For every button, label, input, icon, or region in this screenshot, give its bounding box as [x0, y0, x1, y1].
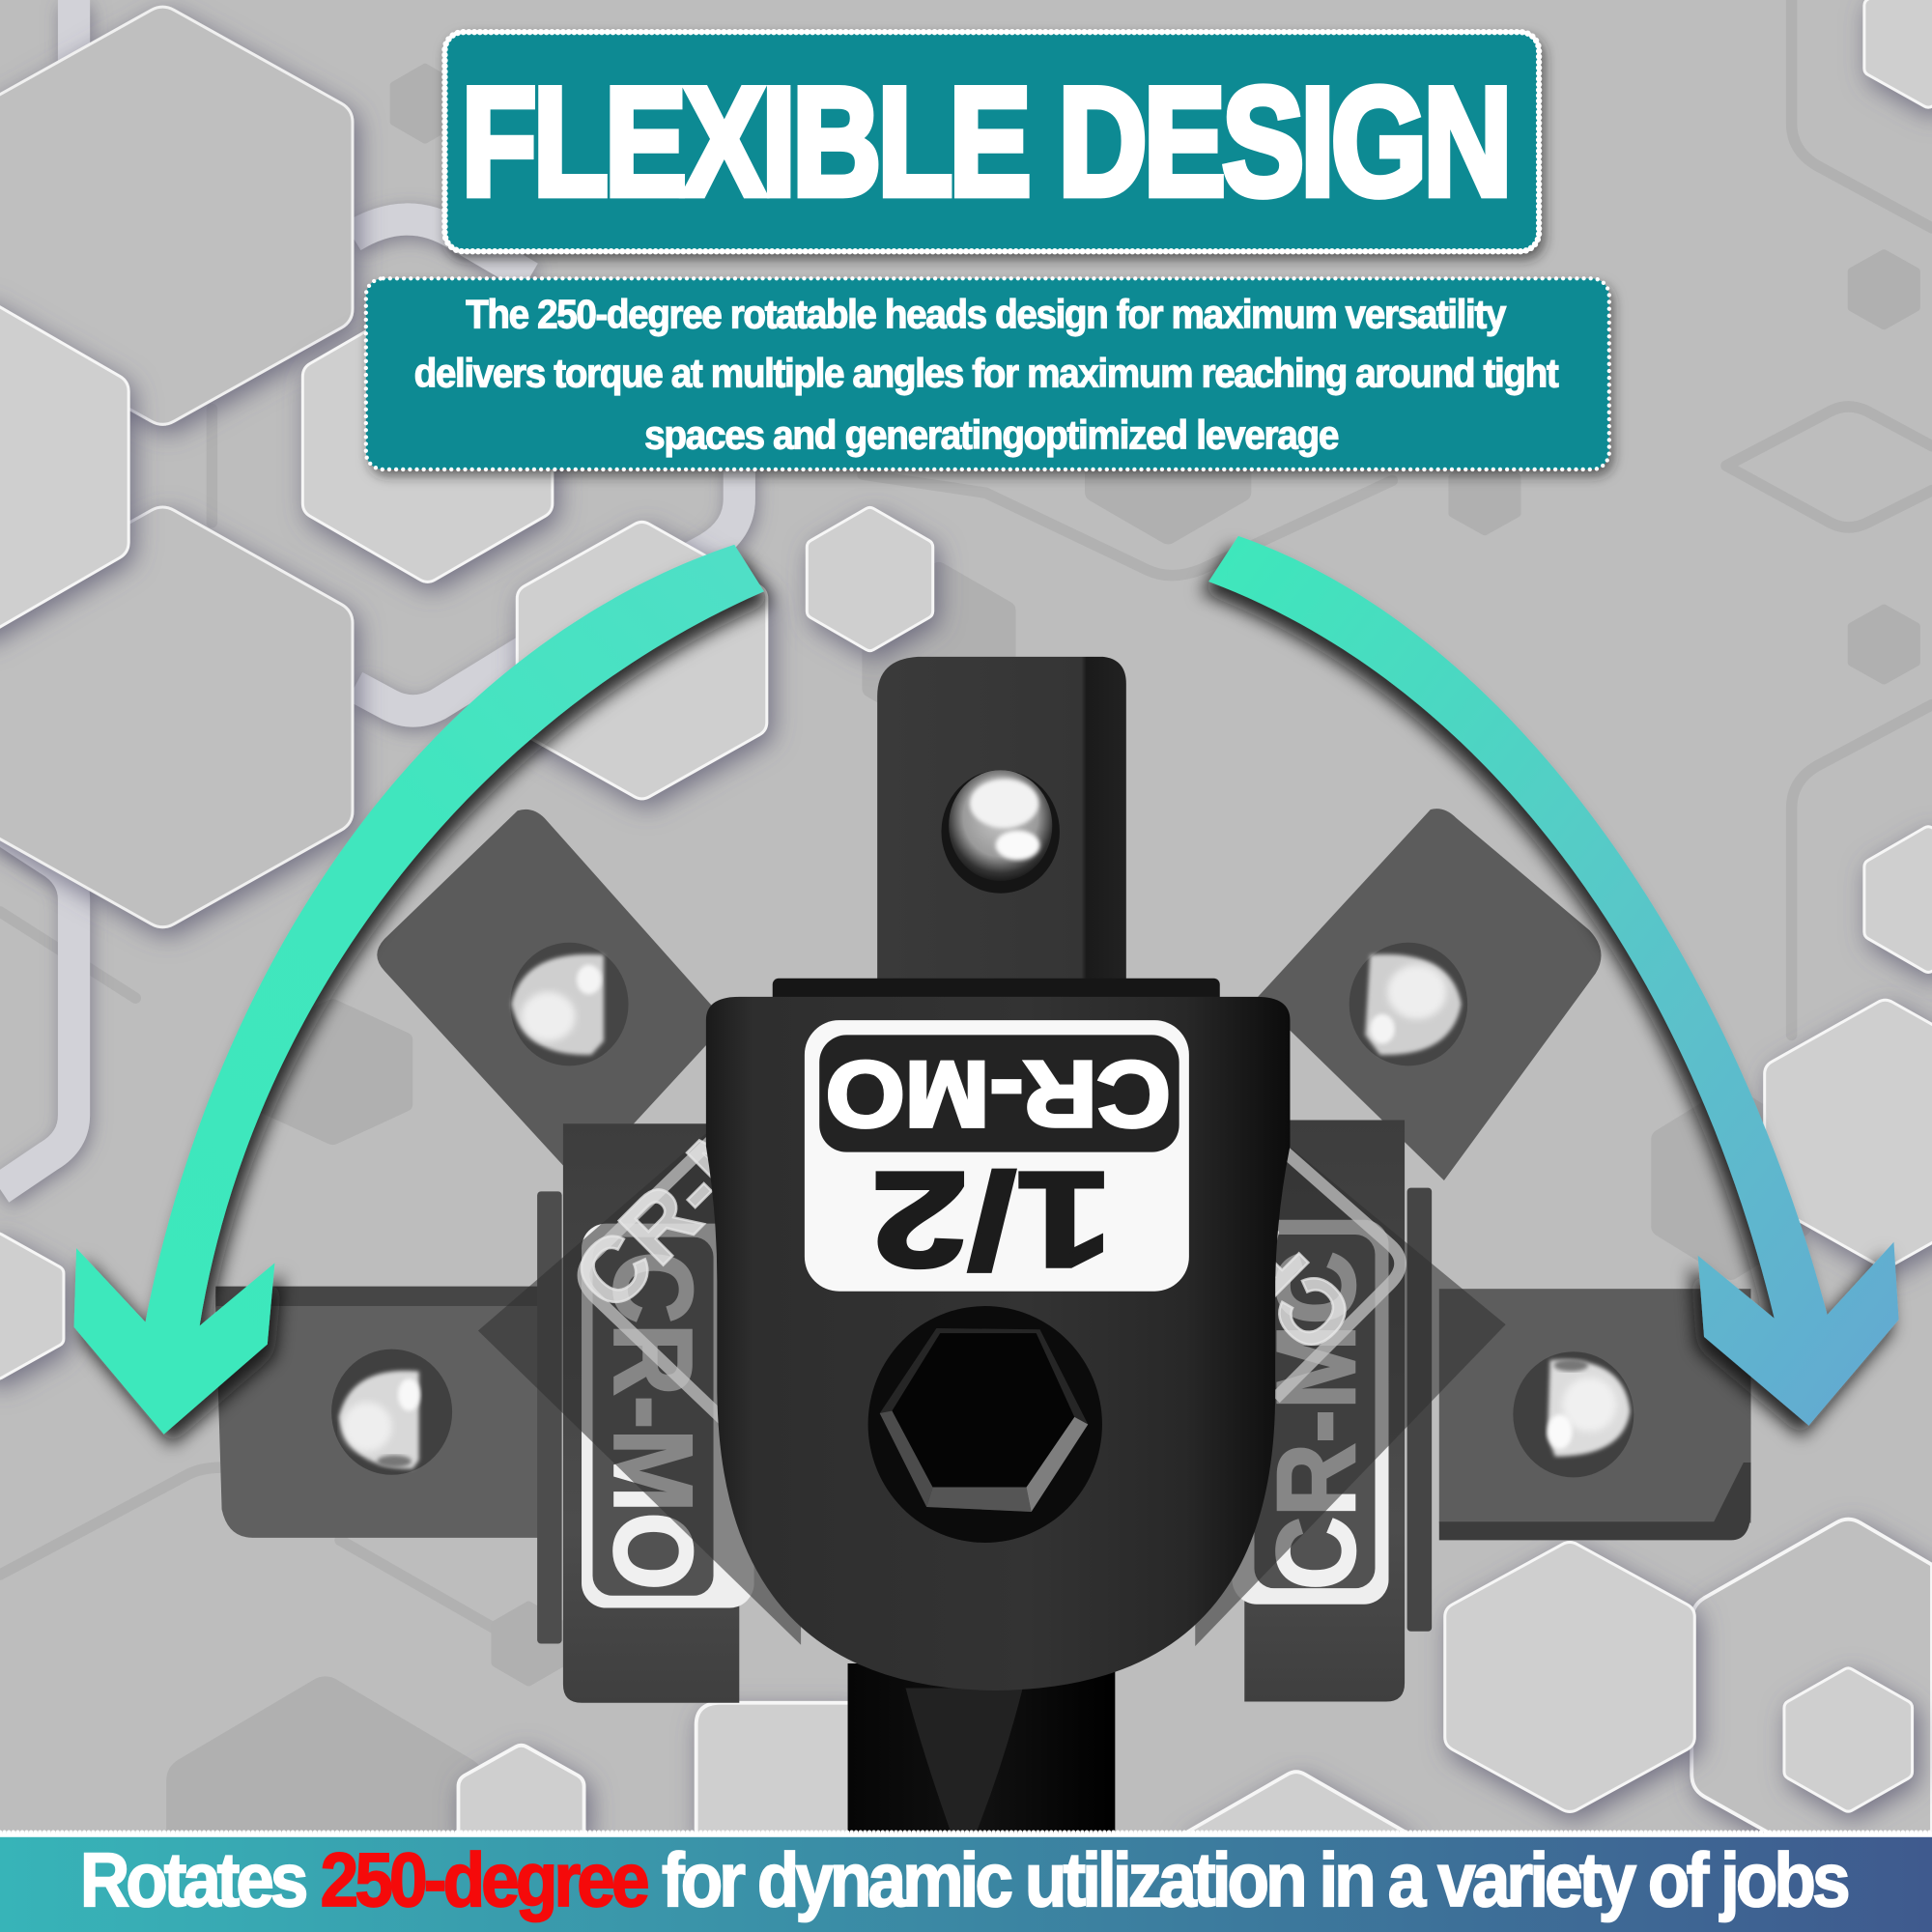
ghost label: right: CR-MC [1255, 1251, 1378, 1590]
ghost drive: upper right [1257, 809, 1602, 1180]
size label: 1/2 [871, 1144, 1113, 1295]
square drive [877, 657, 1126, 985]
ghost tool: rotated head positions [215, 809, 1751, 1703]
heading: FLEXIBLE DESIGN [462, 55, 1512, 228]
shank [848, 1663, 1115, 1833]
size label [805, 1020, 1189, 1295]
ghost label: left: CR-MO [590, 1251, 714, 1590]
ghost rotated body overlay: right: CR-MO [1083, 1081, 1374, 1371]
body [706, 997, 1290, 1690]
shank highlight [906, 1688, 1023, 1833]
ghost drive: right [1439, 1289, 1750, 1540]
ghost ball: upper right [1350, 943, 1467, 1065]
description text: delivers torque at multiple angles for maximum reaching around tight [414, 350, 1559, 396]
banner text: 250-degree [321, 1837, 650, 1922]
ghost drive: upper left [377, 810, 727, 1182]
bottom banner [0, 1833, 1932, 1932]
collar [773, 979, 1220, 1010]
banner text: Rotates [80, 1837, 308, 1922]
banner text [80, 1837, 1851, 1922]
ghost side pin: right [1407, 1188, 1432, 1632]
detent ball [941, 770, 1060, 894]
ghost ball: left [331, 1350, 452, 1475]
arrow: left swing [74, 545, 764, 1435]
ghost label: left [582, 1224, 754, 1608]
arrow: right swing [1208, 536, 1899, 1426]
ghost rotated body overlay: left: CR-MO [555, 1040, 845, 1330]
ghost drive: left [215, 1287, 542, 1538]
ghost ball: upper left [510, 943, 629, 1065]
ghost ball: right [1513, 1351, 1634, 1477]
description text: spaces and generatingoptimized leverage [644, 412, 1339, 458]
panel: title [444, 32, 1539, 251]
main tool: black swivel head [706, 657, 1290, 1833]
panel: description [366, 278, 1609, 469]
hex socket [868, 1306, 1102, 1543]
ghost body: left [563, 1123, 739, 1703]
description text [414, 291, 1559, 458]
banner text: for dynamic utilization in a variety of jobs [662, 1837, 1851, 1922]
size label: CR-MO [826, 1041, 1171, 1147]
description text: The 250-degree rotatable heads design for maximum versatility [466, 291, 1507, 337]
ghost body: right [1244, 1120, 1405, 1701]
ghost rotated body overlay: left [478, 1040, 845, 1645]
ghost rotated body overlay: right [1083, 1081, 1506, 1646]
ghost side pin: left [537, 1191, 562, 1644]
